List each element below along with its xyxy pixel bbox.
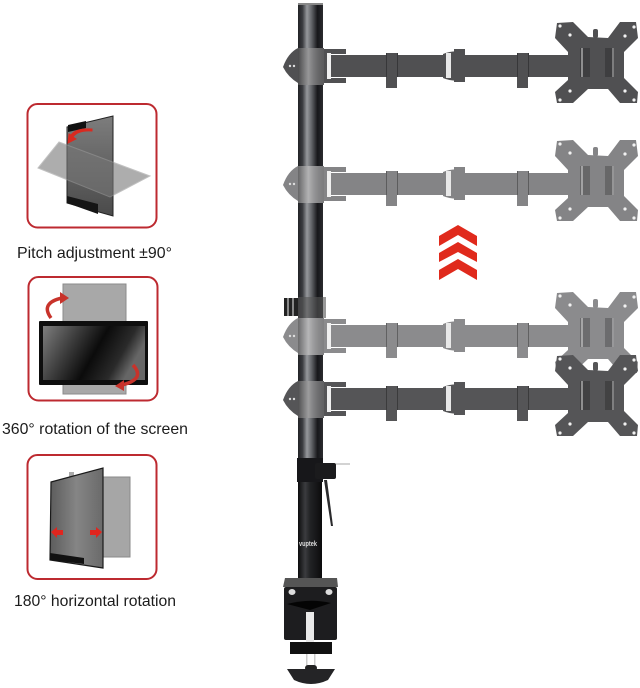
label: horizontal rotation: 180° horizontal rotation — [14, 593, 176, 610]
mounting arm: top position — [283, 22, 638, 103]
pole — [297, 3, 323, 584]
label: screen rotation: 360° rotation of the screen — [2, 421, 188, 438]
panel: screen rotation — [28, 277, 158, 400]
panel: pitch adjustment — [28, 104, 156, 228]
icon: red pitch arrow — [68, 129, 92, 143]
mounting arm: faded position 3 — [283, 292, 638, 373]
icon: portrait monitor behind — [63, 284, 126, 394]
red upward chevrons — [439, 225, 477, 280]
icon: back panel — [103, 477, 130, 557]
panel frame — [28, 277, 158, 400]
mounting arm: faded position 2 — [283, 140, 638, 221]
cable clip with lever — [315, 463, 350, 526]
mounting arm: lower position — [283, 355, 638, 436]
label: pitch adjustment: Pitch adjustment ±90° — [17, 245, 172, 262]
brand mark on pole: vuptek — [299, 541, 317, 548]
panel: horizontal rotation — [28, 455, 156, 579]
icon: front panel — [50, 468, 103, 568]
height stop clip — [284, 297, 326, 318]
icon: red rotation arrows — [47, 298, 138, 385]
icon: tilted monitor — [38, 116, 150, 216]
icon: red horizontal arrows — [51, 527, 102, 538]
desk clamp — [283, 578, 338, 684]
panel frame — [28, 455, 156, 579]
panel frame — [28, 104, 156, 228]
icon: landscape monitor — [39, 321, 148, 385]
